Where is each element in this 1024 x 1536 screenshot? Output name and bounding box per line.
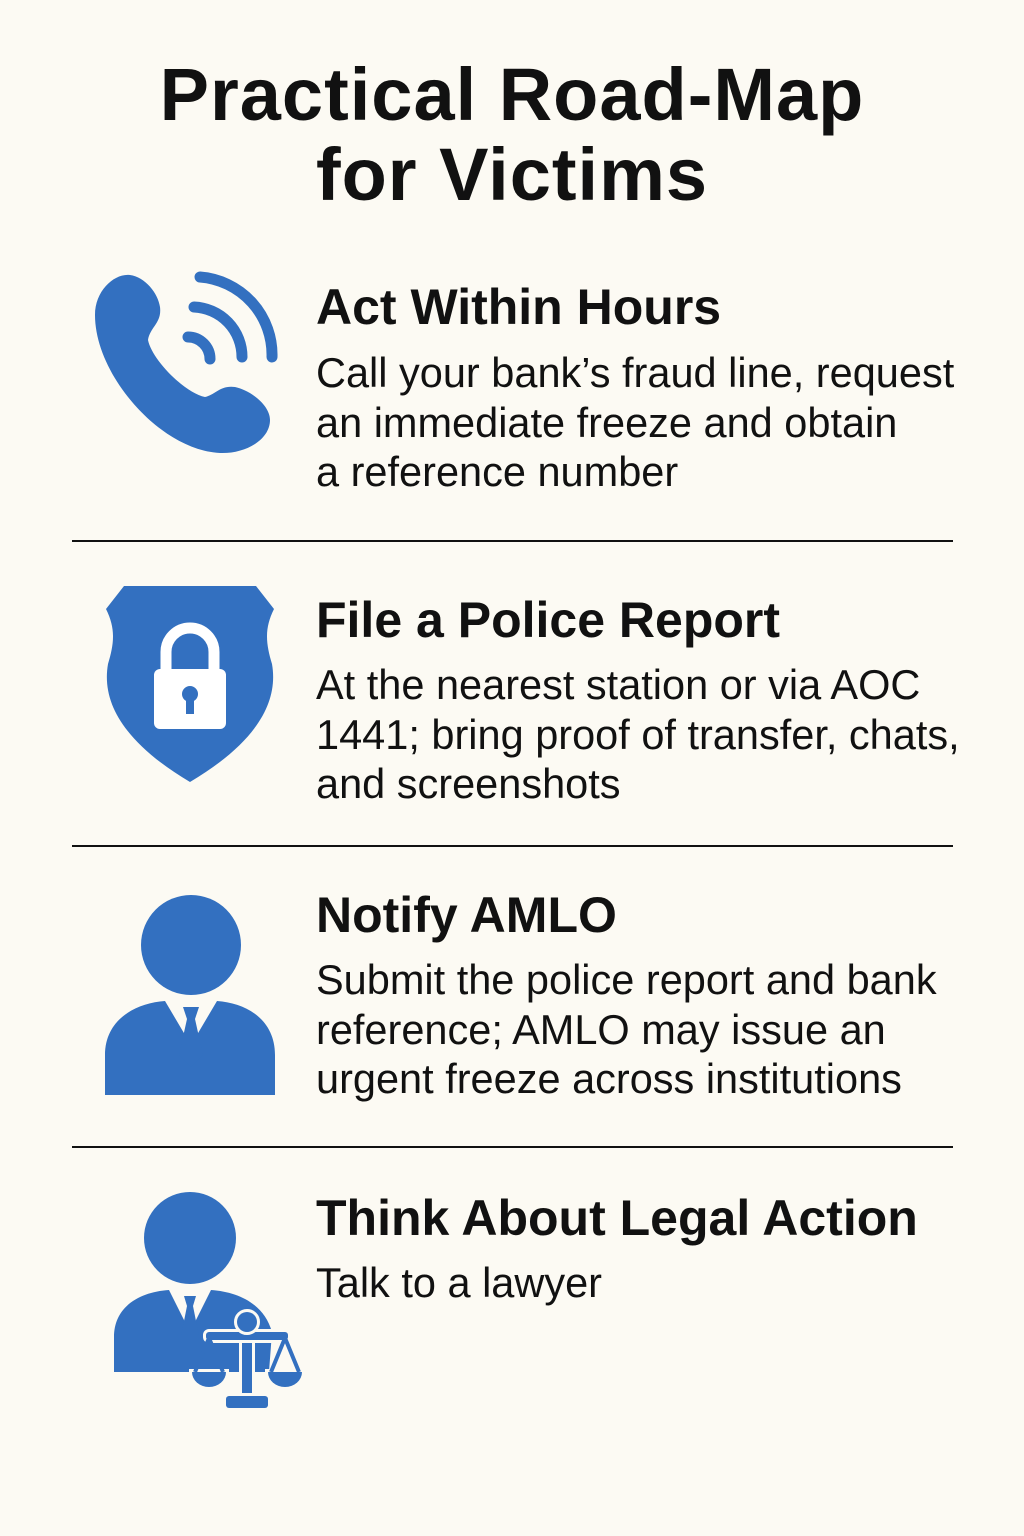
icon: person (105, 895, 275, 1095)
icon: police shield with lock (106, 586, 274, 782)
text 3: urgent freeze across institutions (316, 1055, 902, 1102)
heading 2: File a Police Report (316, 592, 780, 648)
heading 3: Notify AMLO (316, 887, 617, 943)
text 2 (316, 661, 960, 807)
text 4: Talk to a lawyer (316, 1259, 602, 1306)
text 3: Submit the police report and bank (316, 956, 937, 1003)
heading 4: Think About Legal Action (316, 1190, 918, 1246)
icon: lawyer with scales (114, 1192, 302, 1408)
text 1: an immediate freeze and obtain (316, 398, 897, 446)
text 3 (316, 956, 937, 1102)
text 2: and screenshots (316, 760, 621, 807)
text 2: 1441; bring proof of transfer, chats, (316, 710, 960, 758)
text 1: a reference number (316, 448, 678, 495)
icon: phone (95, 272, 278, 453)
text 1: Call your bank’s fraud line, request (316, 349, 954, 396)
text 1 (316, 349, 954, 495)
text 2: At the nearest station or via AOC (316, 661, 920, 708)
title: for Victims (316, 133, 708, 216)
title (160, 53, 864, 216)
title: Practical Road-Map (160, 53, 864, 136)
text 3: reference; AMLO may issue an (316, 1006, 886, 1052)
heading 1: Act Within Hours (316, 279, 721, 335)
